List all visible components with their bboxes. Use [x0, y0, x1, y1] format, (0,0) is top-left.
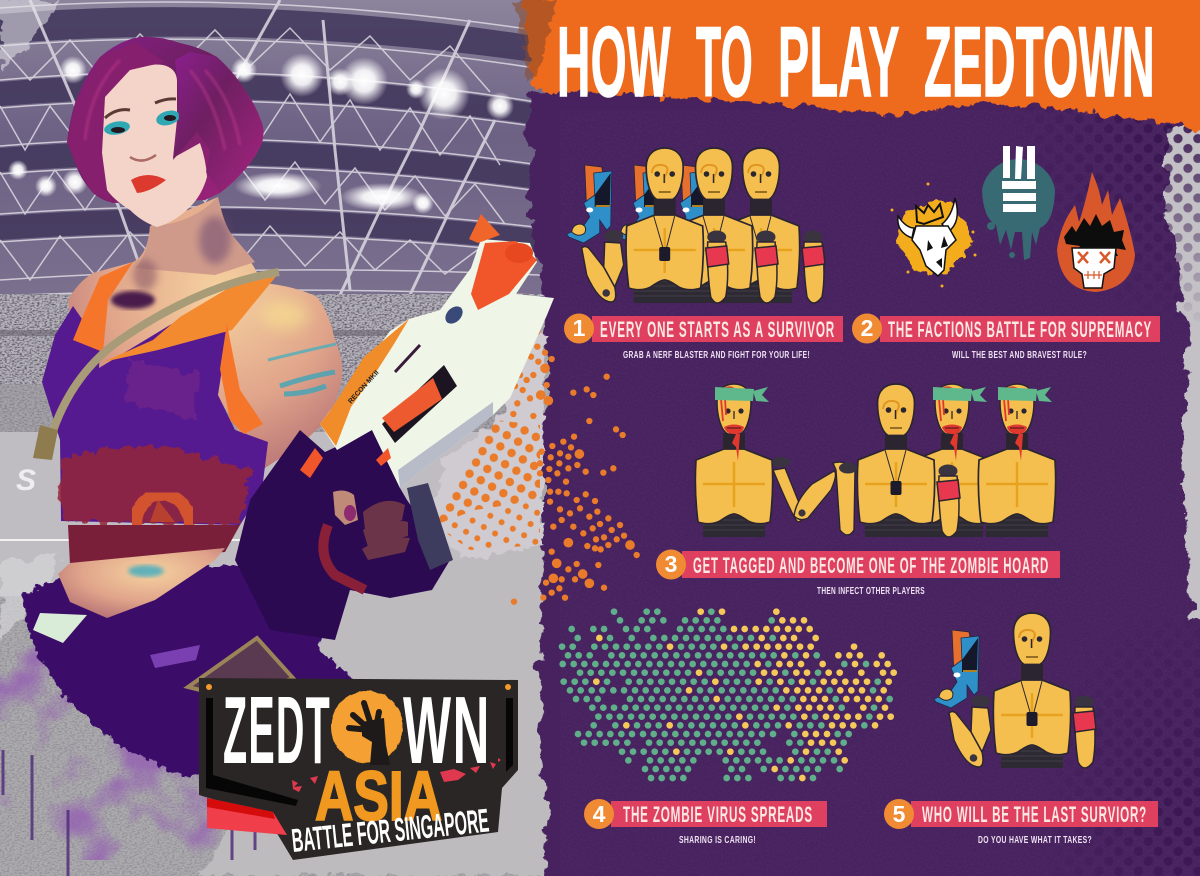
step 2 badge — [852, 314, 1160, 344]
roof trusses — [0, 0, 560, 296]
yellow dots: zombies — [596, 612, 894, 778]
purple panel background — [526, 90, 1200, 876]
figure: woman holding blaster: RECON MKII — [347, 369, 381, 405]
orange header band — [514, 0, 1200, 140]
step 2 badge: 2 — [861, 315, 873, 341]
left background: stadium photo — [0, 0, 620, 876]
step 5 badge: 5 — [893, 801, 906, 827]
step 1 heading: EVERY ONE STARTS AS A SURVIVOR — [600, 317, 835, 342]
faction icon: teal five bars — [982, 146, 1055, 260]
hem and midriff — [68, 525, 240, 565]
left background: stadium photo: S — [16, 464, 36, 497]
dark lower silhouette — [23, 555, 355, 778]
stadium lights — [8, 53, 514, 214]
title — [557, 6, 1155, 117]
title: PLAY — [778, 6, 900, 117]
title: HOW — [557, 6, 671, 117]
figure: woman holding blaster — [3, 37, 554, 876]
step 4 illustration: dot map of the virus spreading — [562, 612, 894, 778]
step 5 illustration: last survivor — [934, 613, 1096, 768]
blaster magazine — [407, 483, 453, 570]
step 2 subtext: WILL THE BEST AND BRAVEST RULE? — [952, 349, 1087, 361]
concrete splat under the figure — [200, 545, 560, 876]
strap — [50, 272, 279, 440]
neck and chest — [68, 197, 342, 470]
step 2 illustration: three faction logos — [890, 146, 1135, 292]
step 3 subtext: THEN INFECT OTHER PLAYERS — [817, 585, 925, 597]
step 1 illustration: survivors with blasters — [567, 148, 825, 303]
faction icon: flaming skull — [1057, 172, 1135, 292]
orange halftone dots — [425, 332, 637, 602]
step 4 badge: 4 — [593, 801, 606, 827]
title: TO — [696, 6, 753, 117]
logo: Zedtown Asia, Battle for Singapore: WN — [403, 677, 491, 784]
hair back — [67, 37, 264, 203]
face — [101, 65, 207, 227]
right edge grunge — [1076, 114, 1200, 620]
step 3 badge — [656, 550, 1060, 580]
dark glove and grip — [235, 430, 450, 640]
green dots: survivors — [562, 612, 890, 778]
step 1 subtext: GRAB A NERF BLASTER AND FIGHT FOR YOUR LIFE! — [623, 349, 810, 361]
blue arm paint — [268, 344, 336, 360]
step 3 illustration: zombies tagging survivor — [695, 384, 1056, 537]
tank top — [42, 283, 268, 525]
step 4 heading: THE ZOMBIE VIRUS SPREADS — [623, 802, 813, 827]
orange trims — [73, 262, 133, 352]
hair fringe — [173, 52, 262, 193]
logo: Zedtown Asia, Battle for Singapore — [199, 677, 518, 860]
blaster body — [320, 239, 554, 488]
logo: Zedtown Asia, Battle for Singapore: BATTLE FOR SINGAPORE — [290, 801, 491, 859]
step 4 badge — [584, 799, 827, 829]
step 5 subtext: DO YOU HAVE WHAT IT TAKES? — [978, 834, 1092, 846]
faction icon: bull skull — [890, 182, 976, 288]
step 1 badge — [564, 314, 843, 344]
tagging arms — [772, 457, 857, 535]
step 5 badge — [884, 799, 1158, 829]
logo: Zedtown Asia, Battle for Singapore: ZEDT — [223, 677, 331, 784]
step 4 subtext: SHARING IS CARING! — [679, 834, 756, 846]
logo: Zedtown Asia, Battle for Singapore: ASIA — [315, 757, 442, 835]
step 1 badge: 1 — [573, 315, 586, 341]
step 3 badge: 3 — [665, 551, 677, 577]
hand — [323, 491, 410, 590]
